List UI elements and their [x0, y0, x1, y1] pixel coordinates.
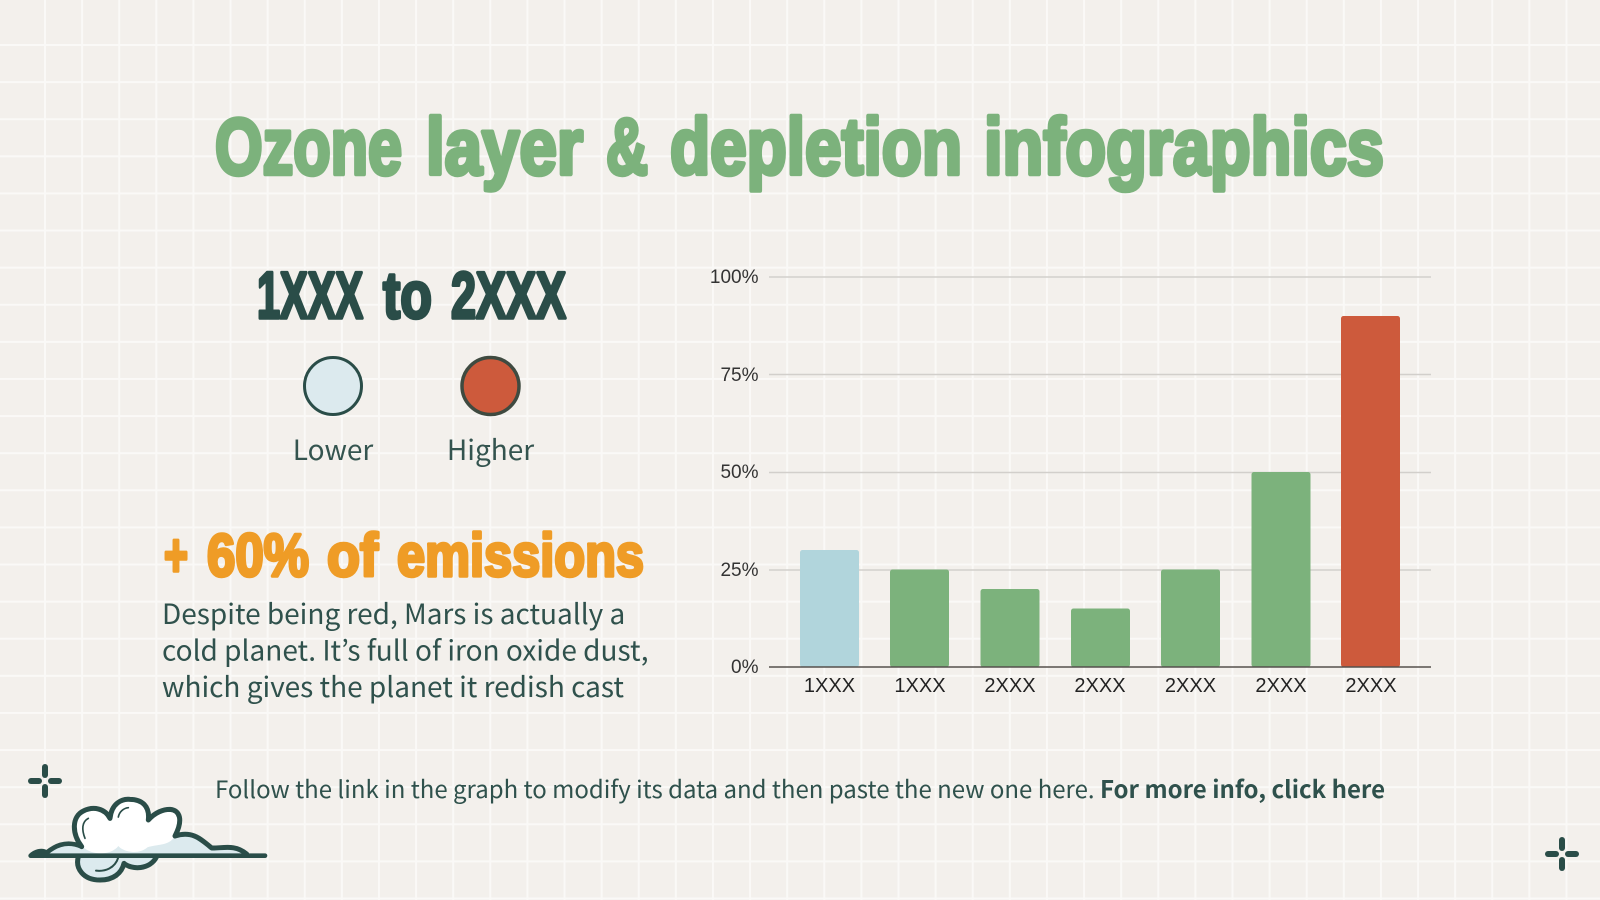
panel: date range legend [257, 258, 566, 469]
description text: cold planet. It’s full of iron oxide dust, [162, 630, 649, 670]
heading: date range: 1XXX [257, 258, 363, 332]
x axis labels: 2XXX [1345, 675, 1397, 697]
x axis labels: 2XXX [1074, 675, 1126, 697]
heading: date range [257, 258, 566, 332]
bar chart [710, 267, 1431, 697]
heading: date range: 2XXX [451, 258, 566, 332]
title: layer [426, 102, 583, 191]
y axis labels [710, 267, 759, 678]
x axis labels: 2XXX [1165, 675, 1216, 697]
title [215, 102, 1384, 191]
x axis labels [804, 675, 1397, 697]
icon: sparkle right [1545, 837, 1579, 871]
title: & [606, 102, 648, 191]
stat heading: + [164, 522, 188, 589]
title: infographics [984, 102, 1384, 191]
x axis labels: 2XXX [984, 675, 1036, 697]
y axis labels: 75% [720, 365, 759, 386]
x axis labels: 1XXX [894, 675, 946, 697]
stat heading: 60% [207, 522, 309, 589]
legend: higher [447, 358, 534, 469]
title: depletion [670, 102, 962, 191]
footer note: Follow the link in the graph to modify its data and then paste the new one here. For more info, click here [215, 770, 1385, 805]
y axis labels: 100% [710, 267, 759, 288]
legend: lower [293, 358, 373, 469]
x axis labels: 2XXX [1255, 675, 1307, 697]
stat heading: emissions [397, 522, 644, 589]
y axis labels: 0% [731, 657, 759, 678]
icon: cloud [31, 799, 265, 880]
heading: date range: to [383, 258, 432, 332]
legend: higher: Higher [447, 429, 534, 469]
description text: which gives the planet it redish cast [162, 666, 624, 706]
y axis labels: 25% [720, 560, 759, 581]
stat heading [164, 522, 644, 589]
x axis labels: 1XXX [804, 675, 855, 697]
bars [800, 316, 1400, 667]
title: Ozone [215, 102, 402, 191]
panel: emissions callout [162, 522, 655, 706]
y axis labels: 50% [720, 462, 759, 483]
stat heading: of [327, 522, 379, 589]
legend: lower: Lower [293, 429, 373, 469]
icon: sparkle left [28, 764, 62, 798]
description text: Despite being red, Mars is actually a [162, 593, 625, 633]
